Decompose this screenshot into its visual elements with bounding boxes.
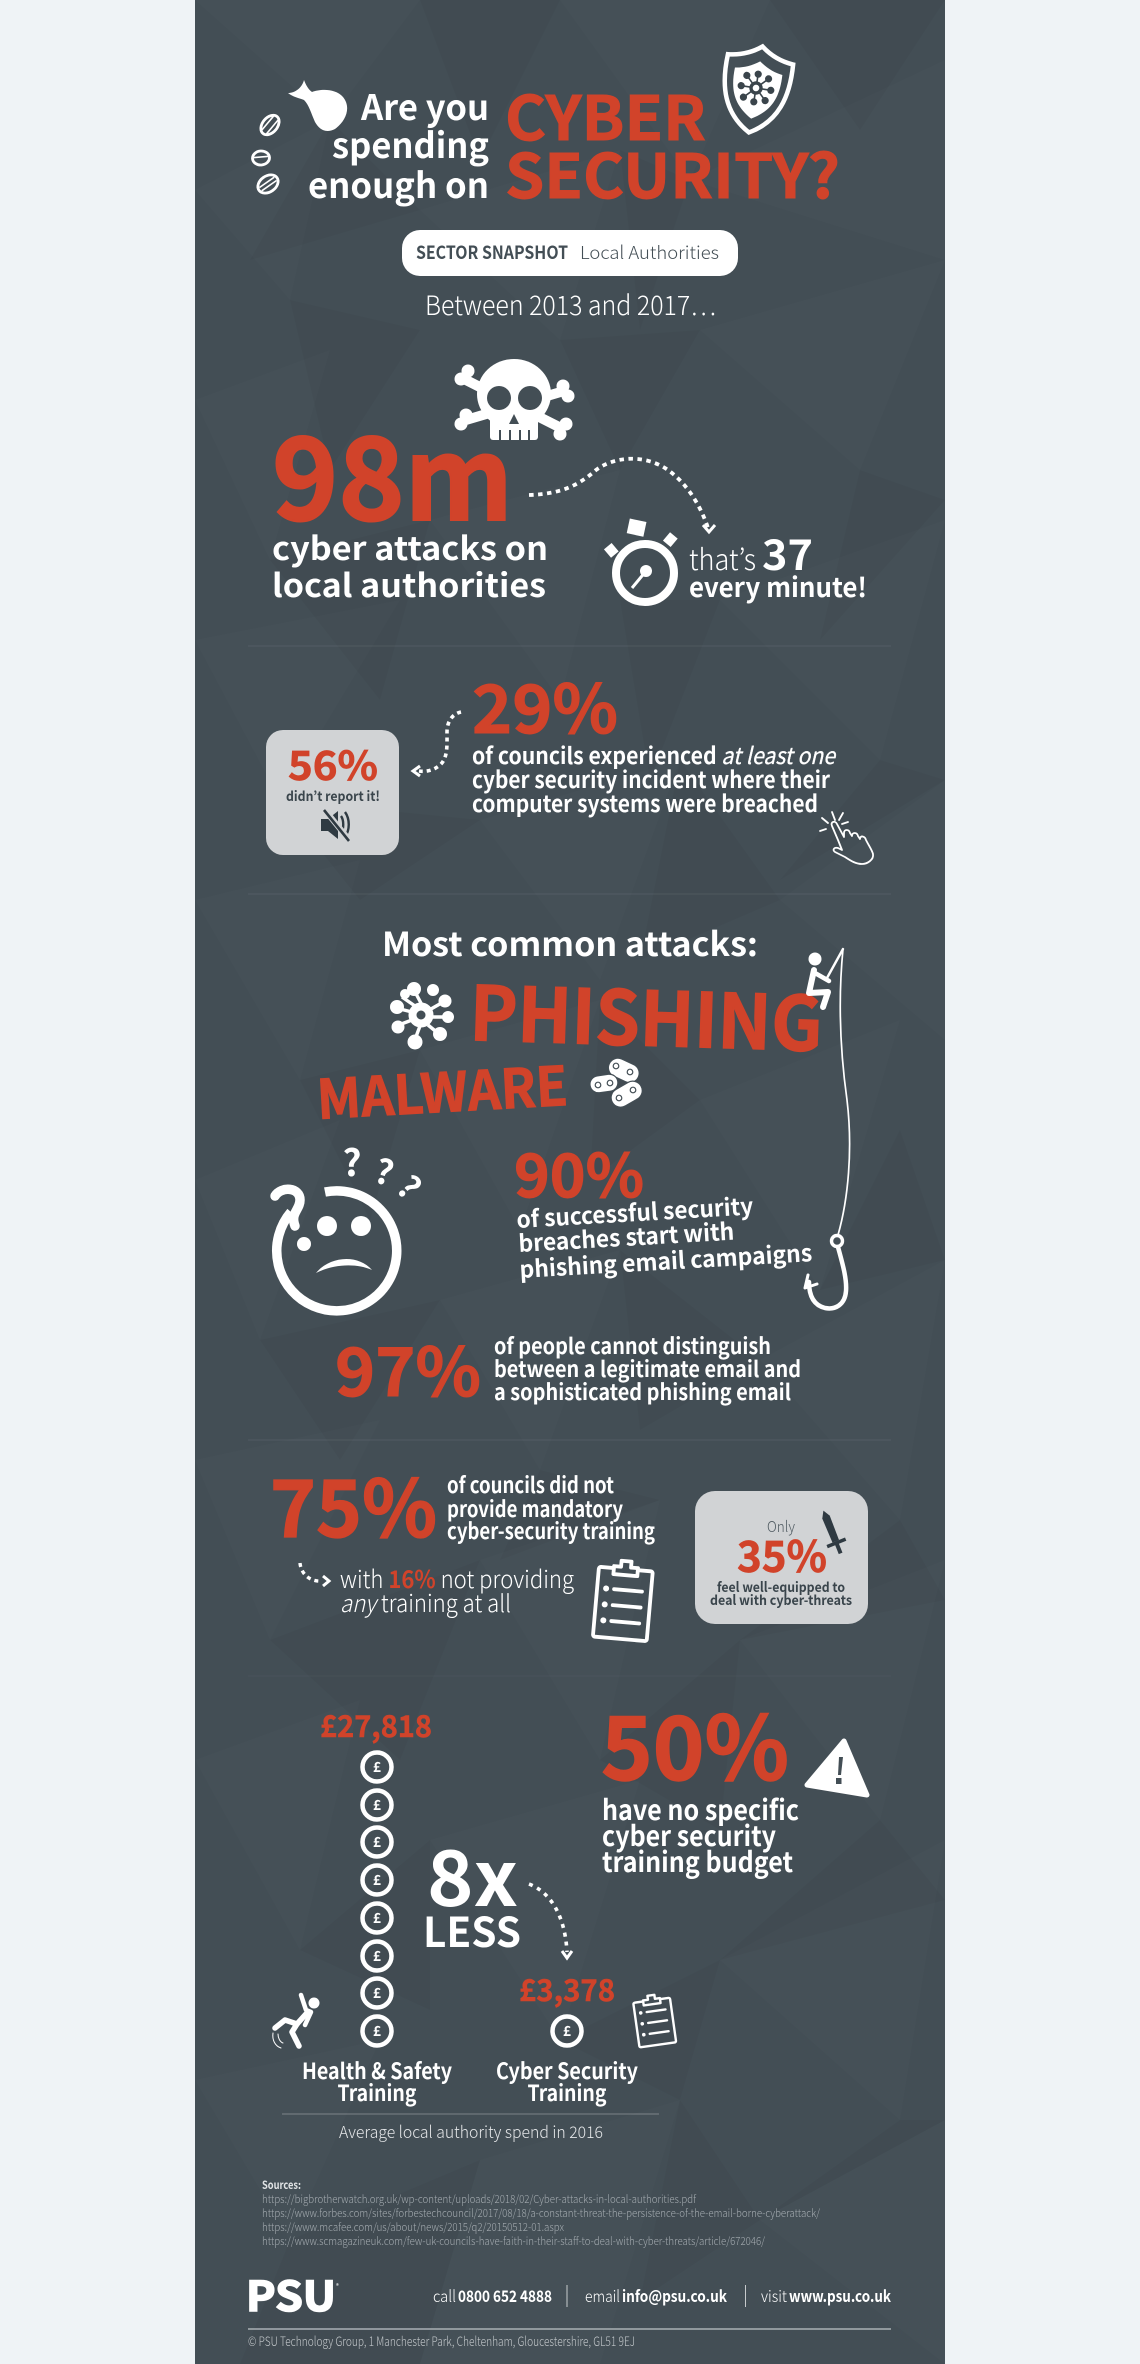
text: councils breached: computer systems were breached — [472, 785, 818, 819]
icon: virus — [390, 982, 454, 1049]
contact details: call — [433, 2283, 456, 2307]
text: mandatory training: cyber-security training — [447, 1514, 655, 1546]
coin stack: health and safety: £ — [373, 1870, 381, 1890]
sources: https://www.mcafee.com/us/about/news/2015/q2/20150512-01.aspx — [262, 2219, 564, 2235]
stat: 98m: 98m — [272, 388, 513, 553]
sector snapshot pill: SECTOR SNAPSHOT — [416, 239, 568, 265]
title: cyber security — [505, 69, 840, 216]
coin stack: health and safety: £ — [373, 1832, 381, 1852]
card: 35% well-equipped: feel well-equipped to — [717, 1576, 845, 1596]
label: £3,378: £3,378 — [519, 1966, 615, 2010]
label: health & safety training: Health & Safety — [302, 2054, 452, 2086]
text: people cannot distinguish: a sophisticated phishing email — [494, 1375, 791, 1407]
icon: clicking hand — [820, 812, 873, 864]
contact details: www.psu.co.uk — [789, 2283, 891, 2307]
text: people cannot distinguish: of people cannot distinguish — [494, 1329, 771, 1361]
icon: shield with virus — [716, 41, 795, 138]
icon: confused sad face — [275, 1133, 434, 1311]
sources — [262, 2177, 821, 2249]
text: phishing email campaigns — [515, 1187, 813, 1285]
sources: Sources: — [262, 2177, 301, 2193]
contact details: visit — [761, 2283, 787, 2307]
card: 35% well-equipped: Only — [767, 1516, 796, 1537]
text: cyber attacks on local authorities — [272, 524, 548, 607]
icon: stopwatch — [604, 519, 678, 602]
text: people cannot distinguish: between a legitimate email and — [494, 1352, 801, 1384]
card: 56% didn't report it: didn’t report it! — [286, 785, 380, 805]
sector snapshot pill — [402, 230, 738, 276]
coin stack: health and safety: £ — [373, 1946, 381, 1966]
label: cyber security training — [496, 2054, 638, 2108]
label: £27,818: £27,818 — [320, 1702, 432, 1746]
word: MALWARE: MALWARE — [314, 1042, 570, 1135]
coin stack: health and safety: £ — [373, 2021, 381, 2041]
stat: 50%: 50% — [601, 1679, 789, 1806]
title: are you spending enough on: spending — [332, 118, 489, 169]
stat: 75%: 75% — [270, 1445, 437, 1560]
card: 35% well-equipped: 35% — [737, 1523, 827, 1585]
icon: muted speaker — [321, 809, 350, 841]
title: are you spending enough on: enough on — [308, 158, 489, 209]
coin stack: health and safety — [362, 1752, 392, 2046]
card: 56% didn't report it — [266, 730, 399, 855]
big multiplier: 8x less: LESS — [423, 1899, 521, 1959]
text: phishing email campaigns: of successful security — [515, 1187, 754, 1235]
icon: falling coins — [252, 112, 283, 197]
text: that's 37 every minute: every minute! — [689, 566, 867, 605]
coin: cyber security: £ — [563, 2021, 571, 2041]
icon: confused sad face: ? — [388, 1163, 434, 1209]
text: 16% no training — [340, 1560, 574, 1619]
icon: confused sad face: ? — [342, 1133, 362, 1187]
caption: average spend: Average local authority spend in 2016 — [339, 2119, 603, 2143]
label: cyber security training: Cyber Security — [496, 2054, 638, 2086]
icon: warning triangle — [807, 1741, 867, 1795]
coin stack: health and safety: £ — [373, 1757, 381, 1777]
logo: PSU: ® — [336, 2281, 339, 2290]
contact details: email — [585, 2283, 620, 2307]
contact details — [433, 2283, 891, 2307]
icon: small clipboard — [633, 1993, 676, 2047]
footer rule — [248, 2328, 891, 2330]
arrow: dotted to 56% card — [413, 712, 461, 776]
text: that's 37 every minute: that’s — [689, 537, 756, 579]
title: cyber security: CYBER — [505, 69, 706, 158]
stat: 90%: 90% — [514, 1128, 644, 1215]
text: mandatory training: of councils did not — [447, 1468, 614, 1500]
logo: PSU: PSU — [246, 2263, 336, 2323]
sources: https://bigbrotherwatch.org.uk/wp-content/uploads/2018/02/Cyber-attacks-in-local-authorities.pdf — [262, 2191, 697, 2207]
text: people cannot distinguish — [494, 1329, 801, 1407]
text: councils breached: of councils experienced at least one — [472, 737, 837, 771]
sector snapshot pill: Local Authorities — [580, 239, 719, 265]
heading: most common attacks: Most common attacks: — [382, 918, 758, 966]
text: mandatory training — [447, 1468, 655, 1546]
label: health & safety training — [302, 2054, 452, 2108]
text: no budget: training budget — [602, 1841, 793, 1881]
card: 35% well-equipped — [695, 1491, 868, 1624]
contact details: info@psu.co.uk — [622, 2283, 727, 2307]
text: councils breached: cyber security incident where their — [472, 761, 831, 795]
text: 16% no training: with 16% not providing — [340, 1560, 574, 1595]
card: 35% well-equipped: deal with cyber-threats — [710, 1589, 852, 1609]
label: health & safety training: Training — [338, 2076, 416, 2108]
dividers — [248, 646, 891, 1676]
text: that's 37 every minute: 37 — [762, 522, 813, 583]
spending comparison chart — [273, 1702, 676, 2143]
arrow: dotted to cyber security spend — [529, 1884, 572, 1958]
card: 56% didn't report it: 56% — [288, 734, 378, 792]
icon: money bag — [288, 80, 347, 131]
text: that's 37 every minute — [689, 522, 867, 605]
title: cyber security: SECURITY? — [505, 127, 840, 216]
text: phishing email campaigns: phishing email campaigns — [518, 1234, 813, 1285]
text: phishing email campaigns: breaches start with — [517, 1213, 735, 1259]
icon: sword — [814, 1507, 850, 1557]
text: councils breached — [472, 737, 837, 819]
icon: bacteria — [589, 1055, 646, 1111]
icon: skull and crossbones — [454, 359, 574, 440]
word: PHISHING: PHISHING — [468, 953, 825, 1073]
title: are you spending enough on: Are you — [360, 80, 489, 131]
copyright: © PSU Technology Group, 1 Manchester Park, Cheltenham, Gloucestershire, GL51 9EJ — [248, 2331, 635, 2350]
dark polygon background panel — [195, 0, 945, 2364]
text: mandatory training: provide mandatory — [447, 1492, 623, 1524]
coin: cyber security — [552, 2016, 582, 2046]
text: no budget: have no specific — [602, 1789, 799, 1829]
stat: 29%: 29% — [472, 656, 618, 753]
text: 16% no training: any training at all — [340, 1584, 511, 1619]
text: no budget: cyber security — [602, 1815, 776, 1855]
coin stack: health and safety: £ — [373, 1795, 381, 1815]
label: cyber security training: Training — [528, 2076, 606, 2108]
sources: https://www.scmagazineuk.com/few-uk-councils-have-faith-in-their-staff-to-deal-with-cyber-threats/article/672046/ — [262, 2233, 766, 2249]
coin stack: health and safety: £ — [373, 1908, 381, 1928]
arrow: dotted to stopwatch — [529, 459, 715, 532]
sources: https://www.forbes.com/sites/forbestechcouncil/2017/08/18/a-constant-threat-the-persistence-of-the-email-borne-cyberattack/ — [262, 2205, 821, 2221]
arrow: dotted to 16% text — [300, 1563, 329, 1586]
text: cyber attacks on local authorities: cyber attacks on — [272, 524, 548, 570]
text: no budget — [602, 1789, 799, 1881]
icon: fisherman with line and hook — [805, 949, 850, 1308]
contact details: 0800 652 4888 — [458, 2283, 552, 2307]
icon: clipboard — [593, 1559, 653, 1641]
icon: confused sad face: ? — [370, 1144, 400, 1196]
big multiplier: 8x less: 8x — [427, 1818, 518, 1929]
subtitle: Between 2013 and 2017… — [425, 284, 716, 323]
icon: person slipping — [273, 1995, 320, 2048]
stat: 97%: 97% — [335, 1319, 481, 1416]
chart baseline — [282, 2113, 659, 2115]
text: cyber attacks on local authorities: local authorities — [272, 561, 546, 607]
title: are you spending enough on — [308, 80, 489, 209]
coin stack: health and safety: £ — [373, 1983, 381, 2003]
